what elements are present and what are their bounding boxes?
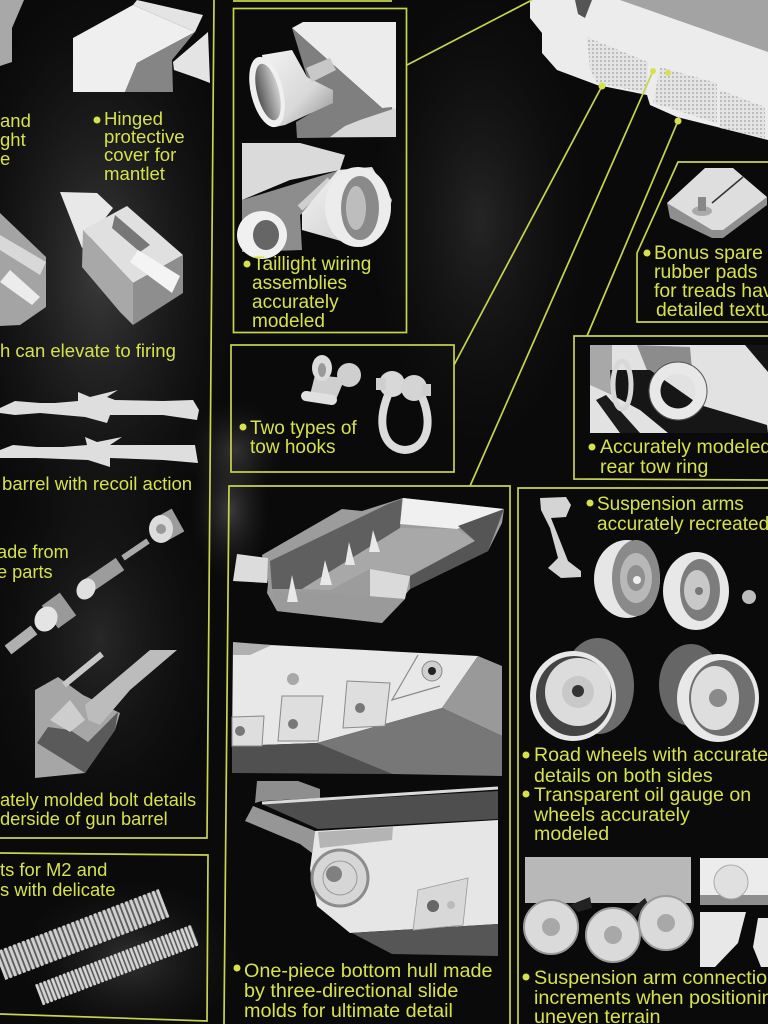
text: cut-off caption: ght xyxy=(0,129,26,150)
bullet xyxy=(234,964,240,972)
text: hull caption: molds for ultimate detail xyxy=(244,1000,453,1022)
text: road wheels caption: wheels accurately xyxy=(533,804,690,826)
arrow: leader lines xyxy=(407,0,682,486)
icon: tow hook two xyxy=(376,371,431,450)
icon: tow hook one xyxy=(306,355,361,402)
text: elevate: h can elevate to firing xyxy=(0,340,176,361)
glare patches xyxy=(0,0,590,1024)
text: road wheels caption: Road wheels with accurate xyxy=(534,744,768,766)
text: hull caption: One-piece bottom hull made xyxy=(244,960,493,982)
panel: taillight wiring xyxy=(233,1,406,332)
text: bolt details: derside of gun barrel xyxy=(0,808,168,829)
text: hinged cover: protective xyxy=(104,126,185,147)
text: recoil: barrel with recoil action xyxy=(2,473,192,494)
text: tow hooks caption: Two types of xyxy=(250,418,357,439)
panel: bonus rubber pads xyxy=(637,162,768,322)
text: suspension arm caption: accurately recreated xyxy=(597,514,768,535)
image: hull side xyxy=(232,642,502,776)
panel: left column features xyxy=(0,0,214,838)
panel: rear tow ring xyxy=(574,336,768,480)
text: taillight caption: assemblies xyxy=(252,273,347,294)
bullet xyxy=(644,250,650,256)
image: large wheels xyxy=(530,638,759,742)
panel: ammunition belts xyxy=(0,853,208,1021)
image: taillight bottom xyxy=(237,143,392,259)
image: rubber pad xyxy=(667,168,767,238)
image: taillight top xyxy=(243,22,396,138)
bullet xyxy=(588,444,596,450)
text: road wheels caption: details on both sides xyxy=(534,765,713,787)
text: taillight caption: accurately xyxy=(252,292,339,313)
image: small wheels xyxy=(594,540,756,630)
bullet xyxy=(94,116,100,124)
text: hinged cover: Hinged xyxy=(104,108,163,129)
image: ammo belts xyxy=(0,903,195,995)
bullet xyxy=(244,260,250,268)
image: suspension arm xyxy=(540,497,581,578)
panel: tow hooks xyxy=(231,345,454,472)
image: hull rear xyxy=(245,781,498,956)
text: M2 caption: s with delicate xyxy=(0,879,116,900)
bullet xyxy=(522,974,530,980)
image: gun barrel underside xyxy=(35,650,177,778)
text: taillight caption: Taillight wiring xyxy=(253,254,371,275)
image: hull tub xyxy=(233,498,504,623)
text: tow ring caption: Accurately modeled xyxy=(600,436,768,458)
image: tank hull top right xyxy=(530,0,768,140)
image: suspension assembly xyxy=(524,857,768,967)
text: hinged cover: cover for xyxy=(104,144,176,165)
text: cut-off caption: e xyxy=(0,148,10,169)
panel: suspension xyxy=(518,488,768,1024)
image: tow ring xyxy=(590,345,768,433)
text: rubber pads caption: Bonus spare xyxy=(654,242,763,264)
bullet xyxy=(586,500,594,506)
text: rubber pads caption: rubber pads xyxy=(654,261,758,283)
image: mantlet assemblies xyxy=(0,192,183,326)
text: road wheels caption: Transparent oil gauge on xyxy=(534,784,751,806)
text: hull caption: by three-directional slide xyxy=(244,980,458,1002)
bullet xyxy=(240,424,246,430)
panel: one-piece bottom hull xyxy=(224,486,510,1024)
text: tow hooks caption: tow hooks xyxy=(250,437,336,458)
bullet xyxy=(522,790,530,798)
text: cut-off caption: and xyxy=(0,110,31,131)
image: top-left fragment xyxy=(0,0,24,66)
text: road wheels caption: modeled xyxy=(534,823,609,845)
image: hinged mantlet cover xyxy=(73,0,210,92)
text: taillight caption: modeled xyxy=(252,311,325,332)
text: M2 caption: ts for M2 and xyxy=(0,859,107,880)
text: tow ring caption: rear tow ring xyxy=(600,456,708,478)
bullet xyxy=(522,752,530,758)
image: gun barrels xyxy=(0,390,199,467)
text: hinged cover: mantlet xyxy=(104,163,166,184)
text: suspension arm caption: Suspension arms xyxy=(597,494,744,515)
text: bolt details: ately molded bolt details xyxy=(0,789,196,810)
image: barrel parts xyxy=(8,515,178,650)
